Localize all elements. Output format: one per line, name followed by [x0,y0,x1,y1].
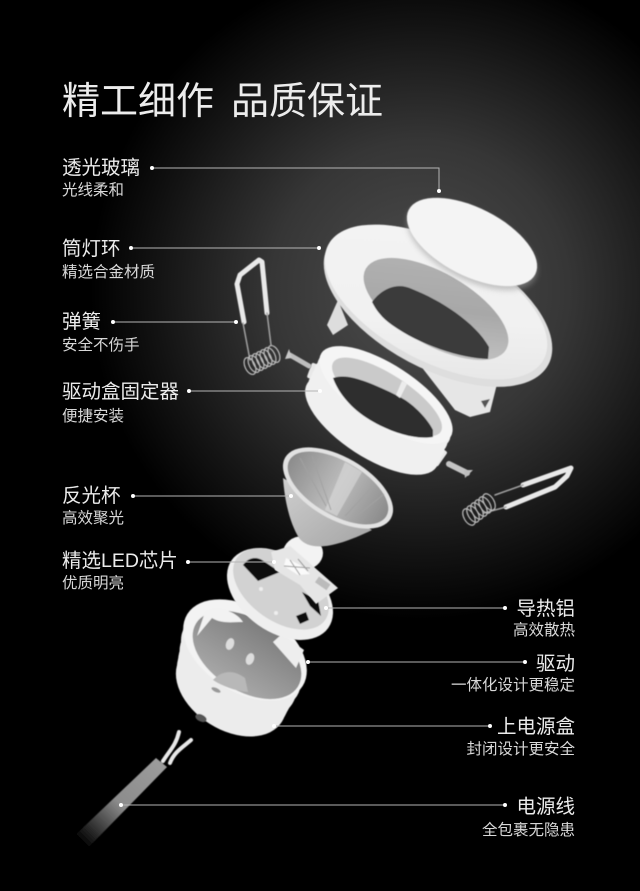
label: spring: 安全不伤手 [62,336,140,354]
recessed light ring [298,192,578,420]
label: power cable [482,796,575,839]
transparent glass disc [393,179,551,309]
label: light ring: 精选合金材质 [62,263,155,281]
leader dots [111,166,527,807]
label: spring [62,311,140,354]
label: driver: 驱动 [536,653,575,675]
title: 精工细作 [62,81,214,123]
label: driver box fixer: 驱动盒固定器 [62,381,179,403]
label: power cable: 全包裹无隐患 [482,821,575,839]
label: reflector cup: 反光杯 [62,485,121,507]
label: transparent glass [62,157,140,199]
title [62,81,383,123]
label: reflector cup: 高效聚光 [62,509,124,527]
label: driver: 一体化设计更稳定 [451,676,575,694]
label: driver box fixer: 便捷安装 [62,407,124,425]
label: driver box fixer [62,381,179,425]
power box [159,578,325,756]
label: upper power box: 上电源盒 [497,716,575,738]
label: reflector cup [62,485,124,527]
label: transparent glass: 光线柔和 [62,181,124,199]
label: upper power box: 封闭设计更安全 [466,740,575,758]
driver box fixer ring [290,328,467,494]
label: light ring: 筒灯环 [62,238,121,260]
label: LED chip: 优质明亮 [62,574,124,592]
right spring [460,468,571,527]
label: driver [451,653,575,694]
title: 品质保证 [231,81,383,123]
leader lines [113,168,525,805]
label: spring: 弹簧 [62,311,101,333]
LED chip board [271,536,338,604]
label: transparent glass: 透光玻璃 [62,157,140,179]
left spring [237,260,282,376]
label: power cable: 电源线 [516,796,575,818]
label: LED chip [62,550,178,592]
screw right [449,464,473,478]
heat-conducting aluminium plate [210,529,350,659]
label: heat-conducting aluminium [513,598,575,639]
label: heat-conducting aluminium: 高效散热 [513,621,575,639]
cable: power line [70,732,191,852]
springs and screws [237,260,571,527]
screw left [285,349,309,366]
label: heat-conducting aluminium: 导热铝 [516,598,575,620]
label: LED chip: 精选LED芯片 [62,550,178,572]
reflector cup [270,431,406,546]
label: light ring [62,238,155,281]
label: upper power box [466,716,575,758]
